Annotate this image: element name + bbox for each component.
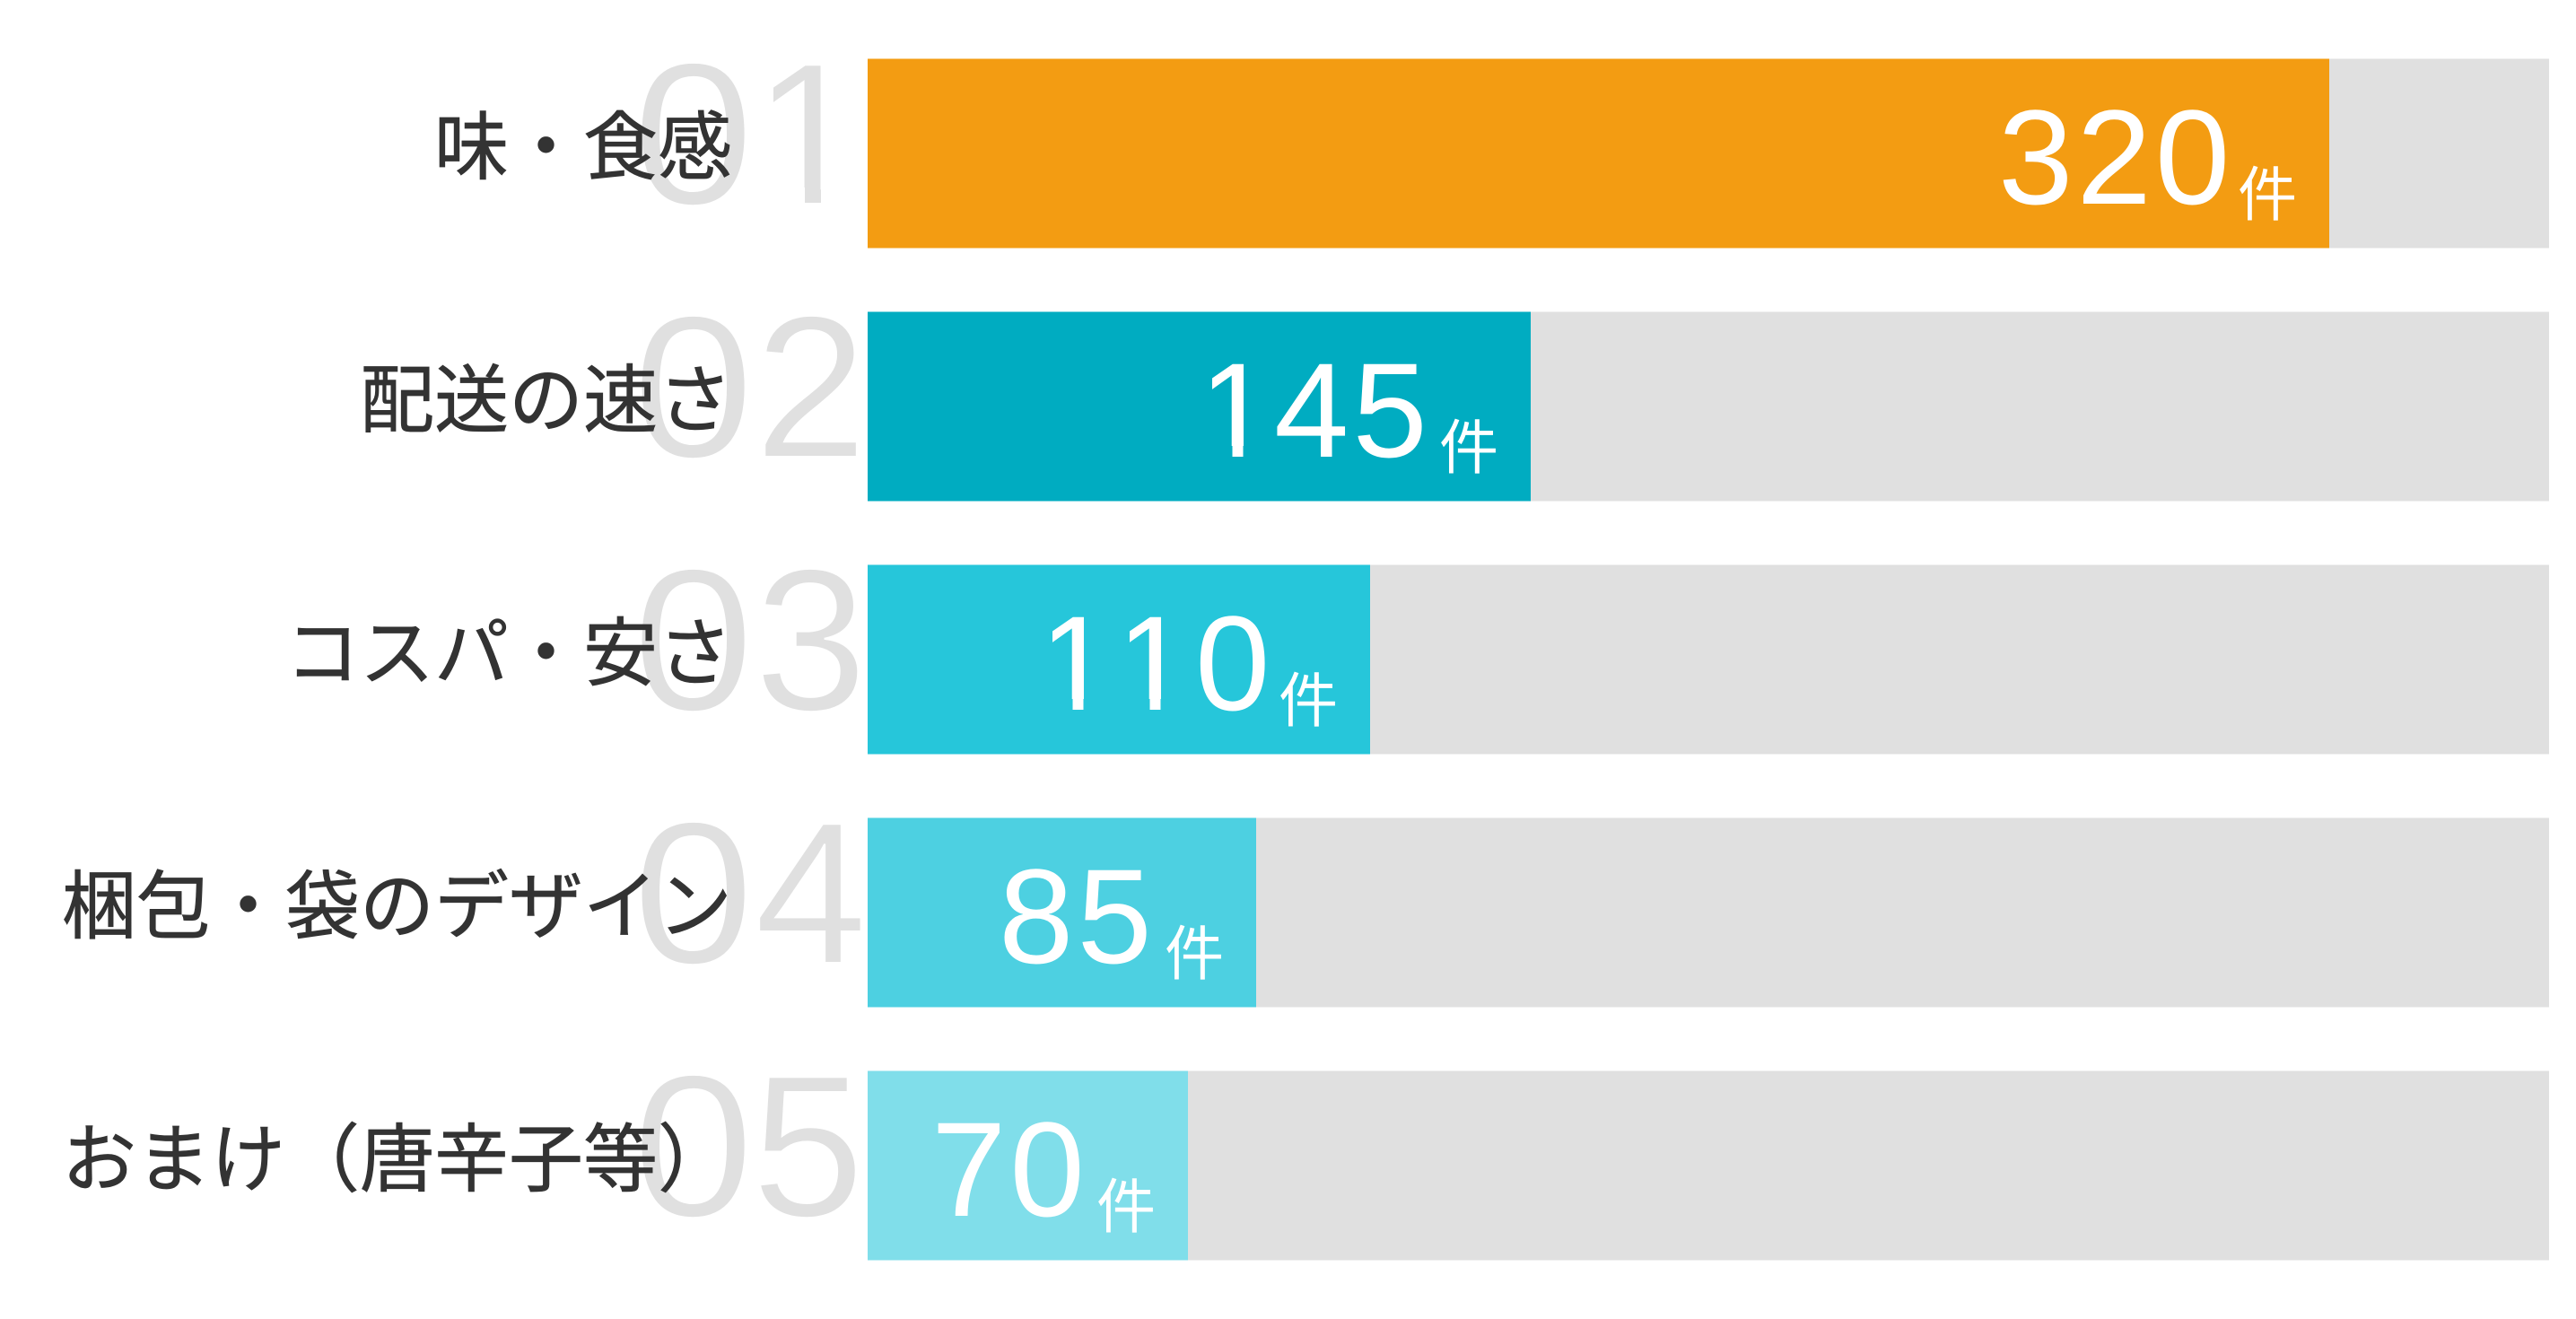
rank number 03: 3: [755, 527, 867, 753]
rank number 04: 4: [755, 780, 867, 1006]
track 1: [868, 59, 2549, 248]
label 3: コスパ・安さ: [285, 612, 732, 695]
unit 4: 件: [1165, 921, 1224, 987]
value 145: 1: [1198, 335, 1276, 485]
value 110: [1052, 616, 1265, 711]
value 85: 85: [999, 841, 1156, 991]
value 110: 0: [1195, 588, 1273, 738]
rank number 04: [633, 780, 867, 1006]
rank number 02: 0: [633, 274, 754, 500]
value 145: [1212, 364, 1422, 458]
rank number 01: [642, 64, 821, 205]
track 3: [868, 565, 2549, 754]
bar 4: [868, 818, 1256, 1007]
row 4: packaging design: [62, 780, 2549, 1007]
rank number 04: 0: [633, 780, 754, 1006]
row 1: taste and texture: [440, 59, 2549, 248]
value 320: 320: [1998, 82, 2233, 232]
label 2: 配送の速さ: [360, 359, 732, 442]
row 2: delivery speed: [363, 312, 2549, 501]
rank number 02: [633, 274, 867, 500]
unit 1: 件: [2238, 162, 2297, 228]
label 5: おまけ（唐辛子等）: [62, 1118, 732, 1201]
unit 2: 件: [1439, 415, 1498, 481]
track 5: [868, 1071, 2549, 1260]
unit 5: 件: [1096, 1174, 1156, 1240]
label 4: 梱包・袋のデザイン: [62, 865, 732, 948]
row 3: value for money: [296, 565, 2549, 754]
bar 1: [868, 59, 2329, 248]
unit 3: 件: [1279, 668, 1338, 734]
rank number 03: 0: [633, 527, 754, 753]
bar 5: [868, 1071, 1188, 1260]
value 70: 70: [931, 1094, 1088, 1245]
track 4: [868, 818, 2549, 1007]
bar 3: [868, 565, 1370, 754]
row 5: freebies: [62, 1033, 2549, 1260]
bar 2: [868, 312, 1531, 501]
track 2: [868, 312, 2549, 501]
value 110: 1: [1115, 588, 1193, 738]
value 110: 1: [1038, 588, 1116, 738]
rank number 03: [633, 527, 867, 753]
rank number 02: 2: [755, 274, 867, 500]
rank number 01: 0: [633, 21, 754, 247]
rank number 05: [633, 1033, 864, 1259]
rank number 05: 0: [633, 1033, 754, 1259]
value 145: 45: [1274, 335, 1431, 485]
rank number 05: 5: [752, 1033, 864, 1259]
label 1: 味・食感: [434, 106, 732, 189]
rank number 01: 1: [753, 21, 865, 247]
